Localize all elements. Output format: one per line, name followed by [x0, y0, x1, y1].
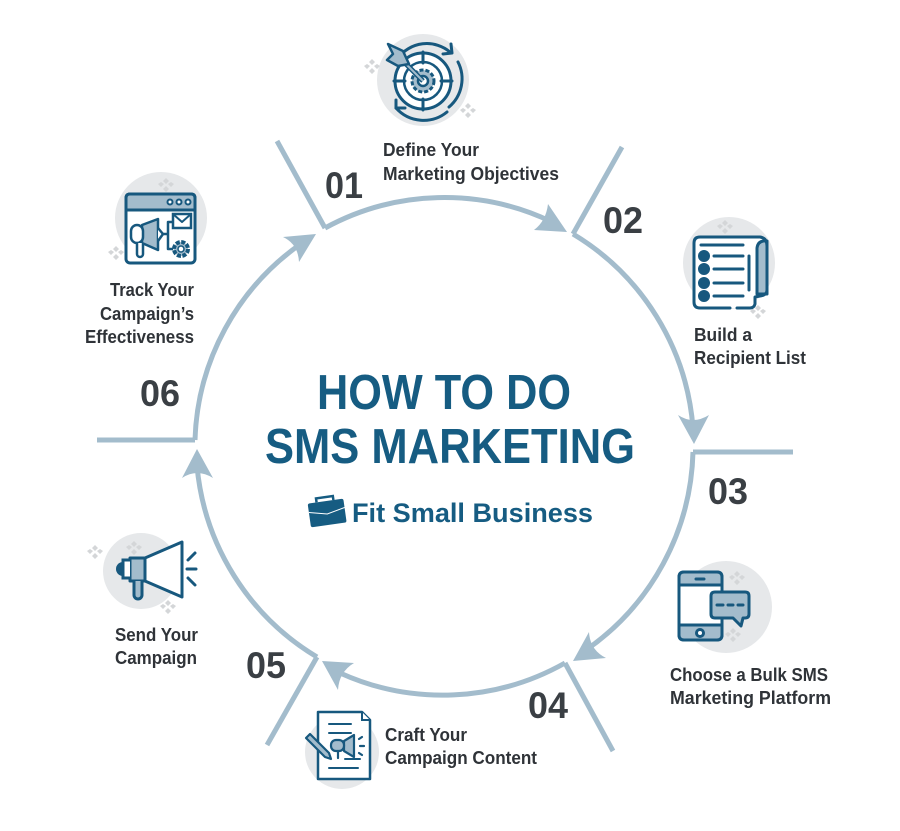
label: step 2: [694, 325, 806, 368]
title: HOW TO DO: [317, 366, 571, 420]
label: step 1: Define Your: [383, 140, 479, 160]
label: step 5: Campaign: [115, 648, 197, 668]
icon: browser with megaphone: [108, 172, 207, 264]
step numbers: 05: [246, 645, 286, 686]
label: step 6: Effectiveness: [85, 327, 194, 347]
label: step 3: Choose a Bulk SMS: [670, 665, 828, 685]
title: SMS MARKETING: [265, 420, 635, 474]
step numbers: 06: [140, 373, 180, 414]
title: [265, 366, 635, 474]
step numbers: 03: [708, 471, 748, 512]
step numbers: 01: [325, 165, 363, 206]
icon: book list: [683, 217, 775, 319]
icon: document with megaphone and pen: [305, 712, 379, 789]
label: step 6: [85, 280, 194, 347]
step numbers: [140, 165, 748, 726]
icon: target with arrow: [364, 34, 476, 126]
label: step 1: Marketing Objectives: [383, 164, 559, 184]
label: step 5: [115, 625, 198, 668]
icon: phone with chat: [679, 561, 772, 653]
label: step 2: Recipient List: [694, 348, 806, 368]
step numbers: 04: [528, 685, 568, 726]
label: step 6: Track Your: [110, 280, 194, 300]
icon: megaphone: [87, 533, 196, 614]
step numbers: 02: [603, 200, 643, 241]
label: step 4: Campaign Content: [385, 748, 537, 768]
label: step 5: Send Your: [115, 625, 198, 645]
label: step 1: [383, 140, 559, 184]
label: step 2: Build a: [694, 325, 753, 345]
label: step 4: [385, 725, 537, 768]
label: step 3: Marketing Platform: [670, 688, 831, 708]
label: step 4: Craft Your: [385, 725, 467, 745]
label: step 3: [670, 665, 831, 708]
label: step 6: Campaign’s: [100, 304, 194, 324]
logo: Fit Small Business: Fit Small Business: [352, 498, 593, 528]
cycle ring with arrows: [97, 141, 793, 751]
